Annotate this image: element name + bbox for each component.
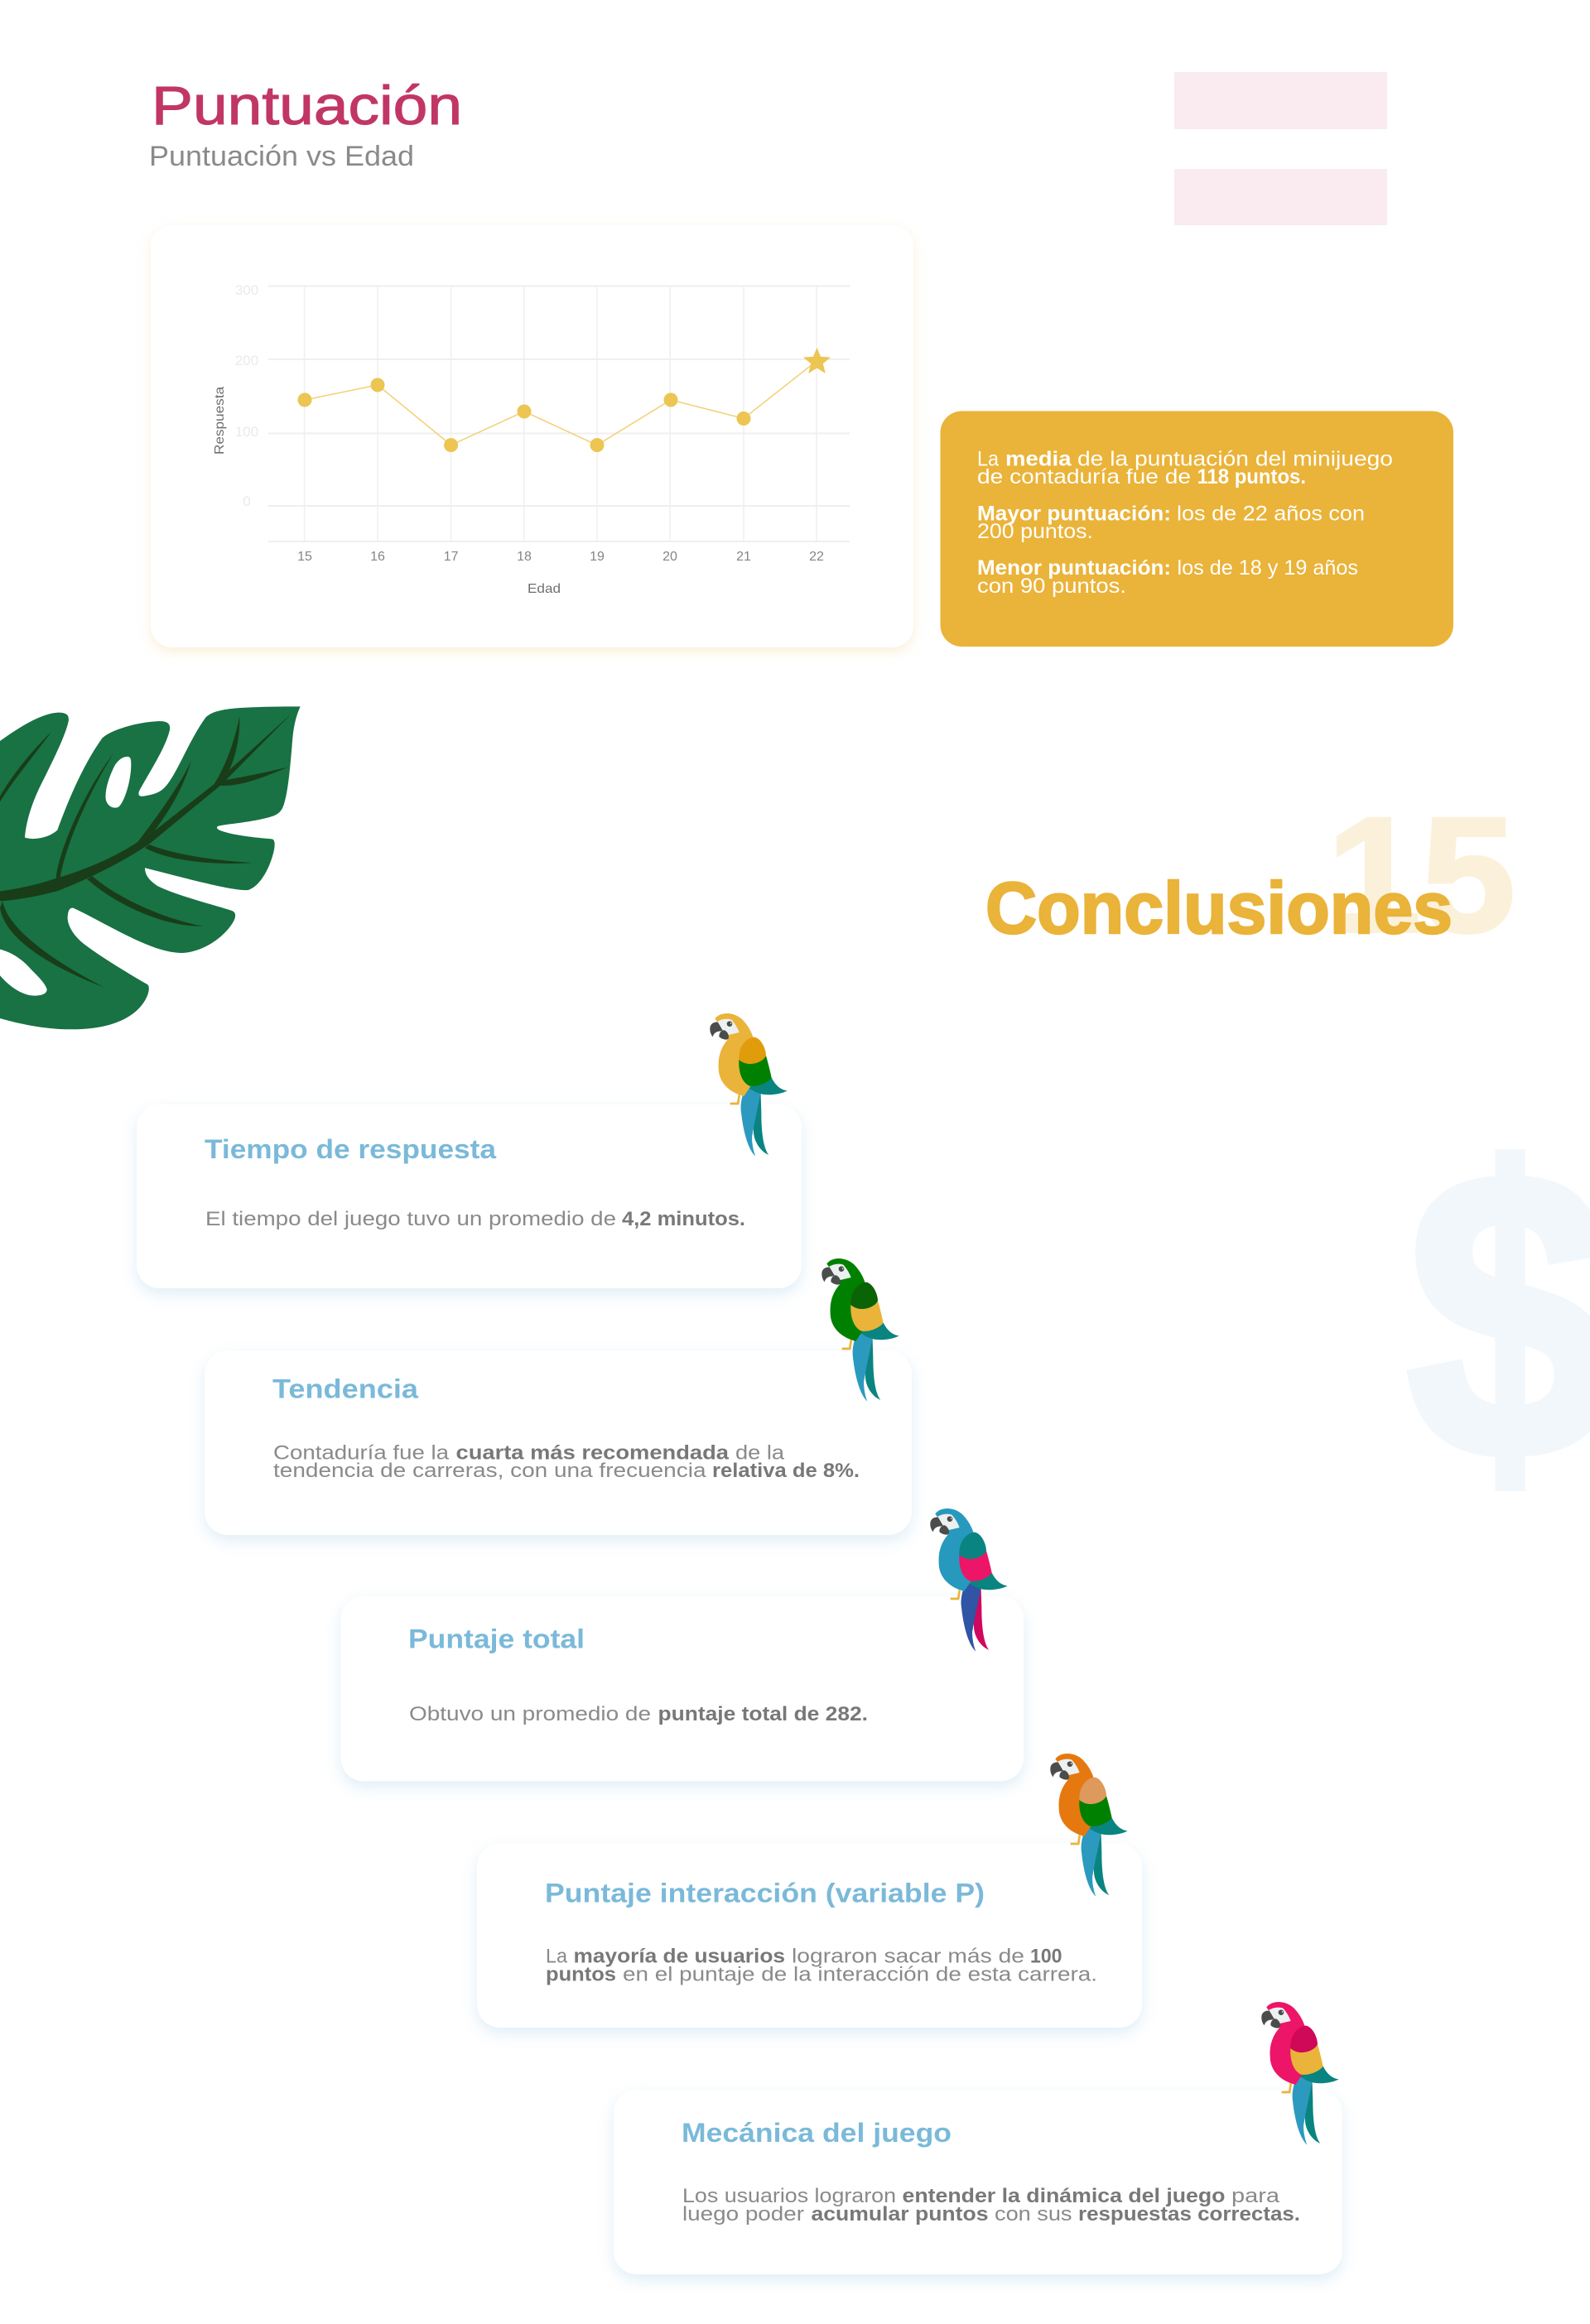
panel: line chart card xyxy=(151,225,913,647)
card text: El tiempo del juego tuvo un promedio de xyxy=(205,1208,616,1230)
card text xyxy=(546,1946,1097,1985)
icon: green parrot xyxy=(822,1258,899,1402)
card text: lograron sacar más de xyxy=(792,1946,1024,1967)
card text: respuestas correctas. xyxy=(1078,2203,1300,2225)
x axis labels: 16 xyxy=(370,550,385,564)
panel: Puntaje interacción xyxy=(477,1754,1142,2028)
card text: relativa de 8%. xyxy=(712,1460,860,1482)
y axis labels: 0 xyxy=(243,493,251,509)
title: Puntuación xyxy=(152,75,462,136)
decorative pink rectangles xyxy=(1174,72,1387,225)
panel: summary callout xyxy=(941,411,1453,647)
x axis title: Edad xyxy=(528,582,561,596)
data points xyxy=(298,378,750,452)
card text: 4,2 minutos. xyxy=(622,1208,745,1230)
summary text: Menor puntuación: xyxy=(977,556,1171,580)
data line xyxy=(305,361,817,445)
card title: Tendencia xyxy=(272,1374,418,1404)
card text: 100 xyxy=(1030,1946,1062,1967)
card title: Mecánica del juego xyxy=(682,2118,952,2148)
summary text: con 90 puntos. xyxy=(977,575,1126,598)
leaf veins xyxy=(0,714,292,988)
card text: puntaje total de 282. xyxy=(658,1703,868,1725)
monstera leaf xyxy=(0,706,301,1029)
card text: Los usuarios lograron xyxy=(682,2185,896,2207)
card text xyxy=(409,1703,868,1725)
summary text: Mayor puntuación: xyxy=(977,502,1171,525)
panel: Tiempo de respuesta xyxy=(137,1013,802,1288)
subtitle: Puntuación vs Edad xyxy=(149,141,414,172)
icon: yellow parrot xyxy=(710,1013,788,1157)
panel: Tendencia xyxy=(205,1258,912,1535)
y axis labels xyxy=(235,282,258,509)
card text: luego poder xyxy=(682,2203,804,2225)
summary text: media xyxy=(1005,447,1072,470)
card text: acumular puntos xyxy=(812,2203,989,2225)
card text: de la xyxy=(735,1442,785,1464)
summary text xyxy=(977,447,1393,598)
card text xyxy=(273,1442,860,1482)
x axis labels: 22 xyxy=(809,550,824,564)
star highest value xyxy=(803,348,831,373)
x axis labels: 15 xyxy=(297,550,312,564)
x axis labels: 18 xyxy=(517,550,532,564)
summary text: 200 puntos. xyxy=(977,520,1093,543)
x axis labels: 20 xyxy=(662,550,677,564)
card text: La xyxy=(546,1946,568,1967)
card title: Puntaje total xyxy=(408,1624,585,1654)
y axis title: Respuesta xyxy=(213,387,227,455)
panel: Mecánica del juego xyxy=(614,2002,1342,2274)
summary text: los de 18 y 19 años xyxy=(1178,556,1358,580)
background number 15: 15 xyxy=(1327,783,1515,966)
icon: orange parrot xyxy=(1050,1754,1128,1897)
card title: Puntaje interacción (variable P) xyxy=(545,1878,985,1908)
card text: puntos xyxy=(546,1964,616,1985)
card text: Obtuvo un promedio de xyxy=(409,1703,651,1725)
card text: en el puntaje de la interacción de esta carrera. xyxy=(623,1964,1097,1985)
summary text: los de 22 años con xyxy=(1177,502,1365,525)
card text: Contaduría fue la xyxy=(273,1442,450,1464)
card text: cuarta más recomendada xyxy=(455,1442,730,1464)
x axis labels xyxy=(297,550,824,564)
y axis labels: 300 xyxy=(235,282,258,298)
summary text: de contaduría fue de xyxy=(977,465,1191,488)
card text xyxy=(682,2185,1300,2225)
chart grid xyxy=(268,286,850,541)
card text: entender la dinámica del juego xyxy=(903,2185,1226,2207)
card text: con sus xyxy=(995,2203,1072,2225)
card text: tendencia de carreras, con una frecuencia xyxy=(273,1460,706,1482)
y axis labels: 100 xyxy=(235,424,258,440)
card text xyxy=(205,1208,745,1230)
x axis labels: 19 xyxy=(590,550,605,564)
panel: Puntaje total xyxy=(341,1508,1024,1782)
x axis labels: 21 xyxy=(736,550,751,564)
summary text: 118 puntos. xyxy=(1197,465,1306,488)
card text: mayoría de usuarios xyxy=(573,1946,785,1967)
x axis labels: 17 xyxy=(444,550,459,564)
card text: para xyxy=(1231,2185,1280,2207)
summary text: La xyxy=(977,447,999,470)
icon: blue parrot xyxy=(930,1508,1008,1652)
section heading: Conclusiones: Conclusiones xyxy=(985,867,1453,949)
icon: red parrot xyxy=(1261,2002,1339,2145)
y axis labels: 200 xyxy=(235,353,258,368)
card title: Tiempo de respuesta xyxy=(205,1134,496,1164)
summary text: de la puntuación del minijuego xyxy=(1077,447,1393,470)
